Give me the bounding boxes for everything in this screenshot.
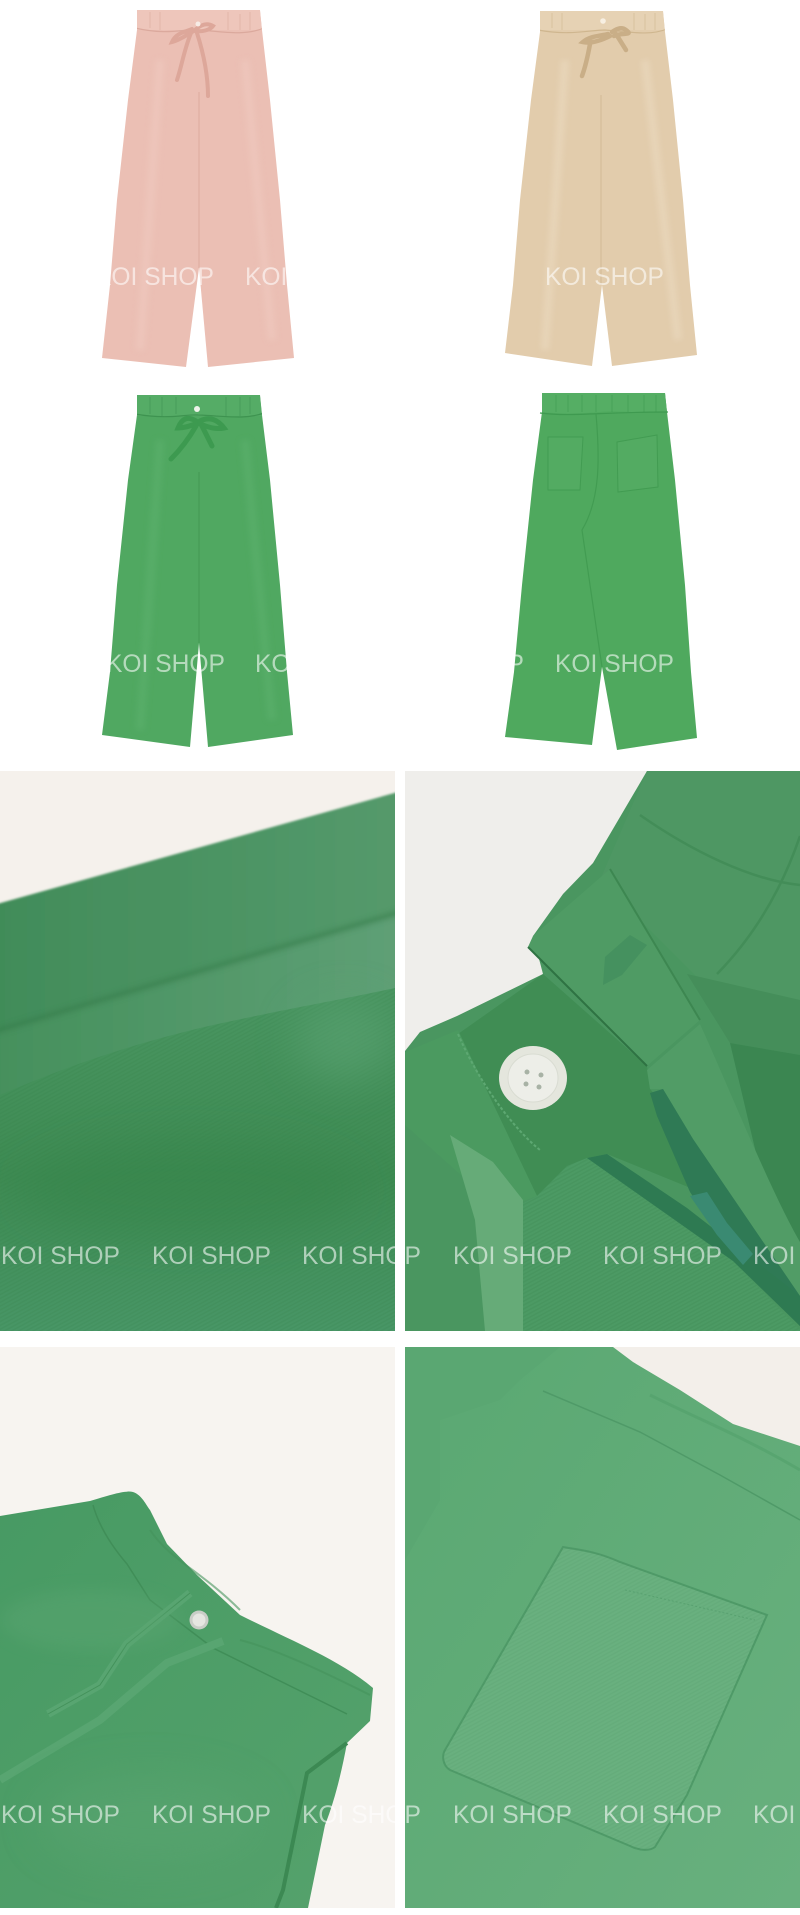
zipper strip upper xyxy=(650,1089,800,1296)
waist button xyxy=(194,406,200,412)
watermark: KOI SHOP green pants: KOI SHOP xyxy=(405,651,524,678)
inner front panel xyxy=(460,974,688,1196)
shadow panel right xyxy=(730,1043,800,1250)
product photo: pink pants front xyxy=(102,10,294,367)
button hole stitching xyxy=(603,935,647,985)
watermark: KOI SHOP pink pants: KOI SHOP xyxy=(245,264,364,291)
watermark: KOI SHOP row two details: KOI SHOP xyxy=(603,1802,722,1829)
detail photo: back patch pocket xyxy=(405,1347,800,1908)
watermark: KOI SHOP row one details: KOI SHOP xyxy=(1,1243,120,1270)
drawstring bow xyxy=(582,28,629,76)
watermark: KOI SHOP green pants: KOI SHOP xyxy=(555,651,674,678)
watermark: KOI SHOP row two details: KOI SHOP xyxy=(302,1802,421,1829)
green garment base xyxy=(405,771,800,1331)
watermark: KOI SHOP pink pants: KOI SHOP xyxy=(95,264,214,291)
watermark: KOI SHOP green pants: KOI SHOP xyxy=(106,651,225,678)
back pocket right xyxy=(617,435,658,492)
watermark: KOI SHOP row two details: KOI SHOP xyxy=(453,1802,572,1829)
watermark: KOI SHOP green pants: KOI SHOP xyxy=(255,651,374,678)
watermark: KOI SHOP row one details: KOI SHOP xyxy=(152,1243,271,1270)
drawstring xyxy=(450,1135,523,1331)
detail photo: button and zipper xyxy=(405,771,800,1331)
product photo: green pants front xyxy=(102,395,293,747)
watermark: KOI SHOP pink pants xyxy=(95,264,364,291)
watermark: KOI SHOP row two details: KOI SHOP xyxy=(152,1802,271,1829)
watermark: KOI SHOP beige pants: KOI SHOP xyxy=(545,264,664,291)
detail photo: waistband with snap xyxy=(0,1347,395,1908)
watermark: KOI SHOP row one details: KOI SHOP xyxy=(603,1243,722,1270)
product photo: green pants back xyxy=(505,393,697,750)
pocket opening xyxy=(276,1743,347,1908)
watermark: KOI SHOP row one details: KOI SHOP xyxy=(453,1243,572,1270)
waistband seam xyxy=(543,1391,800,1520)
zipper tape xyxy=(587,1154,800,1326)
waist button xyxy=(600,18,606,24)
zipper slider xyxy=(690,1192,753,1265)
detail photo: fabric close-up xyxy=(0,771,405,1331)
pants body xyxy=(405,1347,800,1908)
fabric fold foreground xyxy=(0,988,395,1331)
watermark: KOI SHOP row two details xyxy=(1,1802,800,1829)
watermark: KOI SHOP green pants xyxy=(106,651,674,678)
left waistband xyxy=(459,1033,526,1174)
fabric fold middle xyxy=(0,918,395,1095)
right flap xyxy=(647,1070,800,1250)
watermark: KOI SHOP row one details xyxy=(1,1243,800,1270)
pearl button xyxy=(499,1046,567,1110)
watermark: KOI SHOP row one details: KOI SHOP xyxy=(302,1243,421,1270)
metal snap xyxy=(190,1610,208,1630)
back pocket left xyxy=(548,437,583,490)
drawstring bow xyxy=(172,24,213,96)
drawstring xyxy=(0,1593,223,1780)
belt strip xyxy=(691,975,794,1054)
pants body xyxy=(0,1492,373,1908)
fly flap xyxy=(528,936,538,956)
product photo: beige pants front xyxy=(505,11,697,366)
back waistband xyxy=(646,771,647,772)
drawstring bow xyxy=(171,418,224,459)
watermark: KOI SHOP row two details: KOI SHOP xyxy=(1,1802,120,1829)
lower front panel xyxy=(538,1158,586,1195)
patch pocket xyxy=(443,1547,767,1850)
fabric fold upper xyxy=(0,790,405,1050)
waistband seam xyxy=(93,1505,347,1714)
waist button xyxy=(196,22,200,26)
